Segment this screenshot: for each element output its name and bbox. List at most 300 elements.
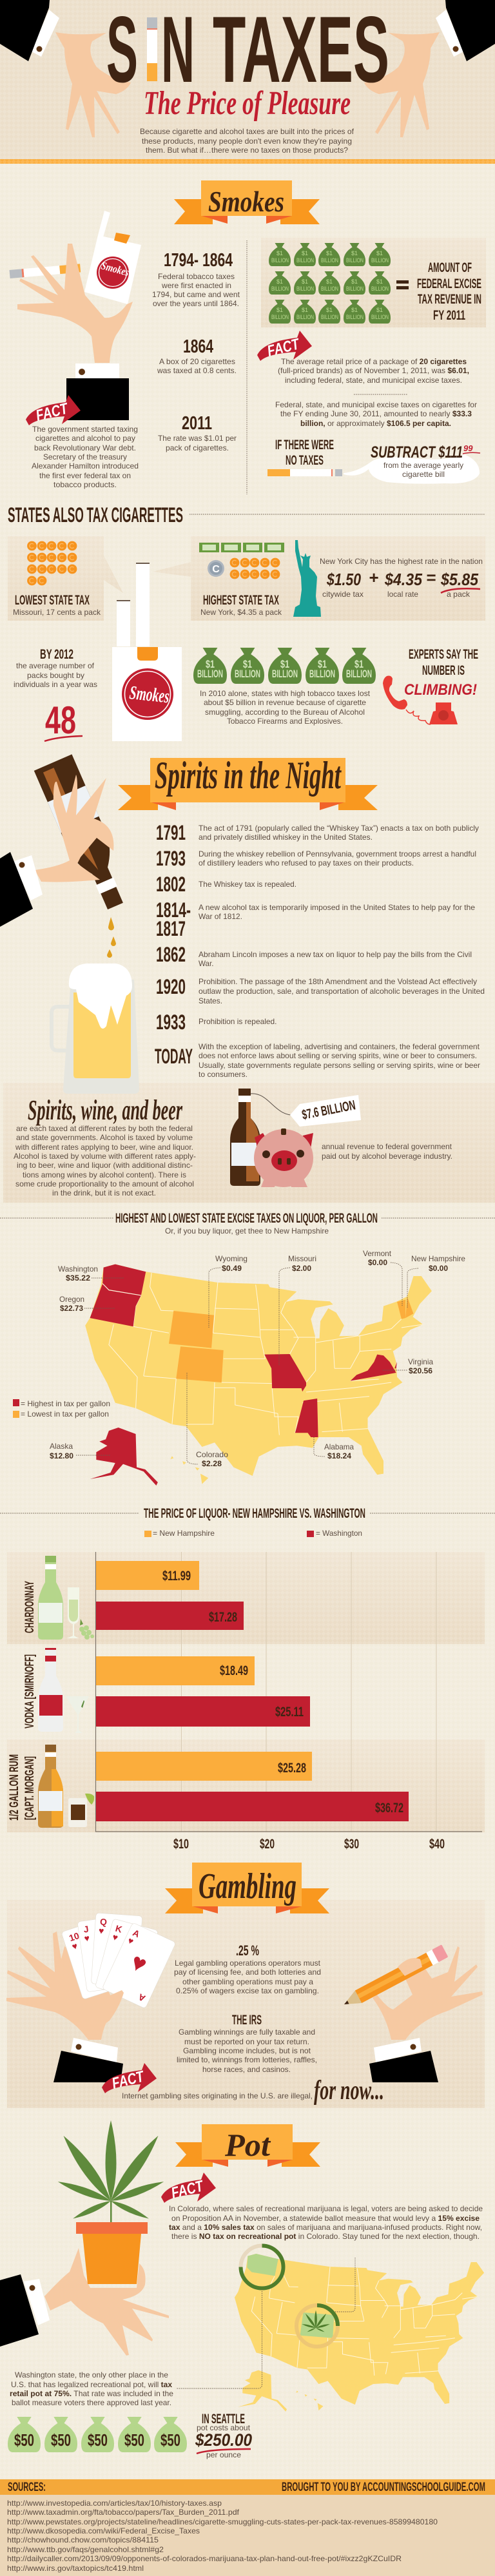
colorado fact text: there is NO tax on recreational pot in Colorado. Stay tuned for the next election, though. <box>171 2232 480 2241</box>
sources panel <box>0 2495 495 2576</box>
money bags: 15 billion: BILLION <box>346 314 364 320</box>
icon: playing cards: ♥ <box>99 1925 104 1936</box>
lowest state tax label <box>13 593 101 617</box>
money bags: 15 billion: $1 <box>302 250 308 257</box>
icon: cigarette <box>267 469 342 476</box>
map: legal marijuana states <box>235 2245 484 2412</box>
intro text: Because cigarette and alcohol taxes are built into the prices of <box>140 128 354 136</box>
entry 1793: 1793 <box>156 847 186 870</box>
experts say callout <box>404 647 478 699</box>
category label: vodka: VODKA [SMIRNOFF] <box>23 1654 37 1729</box>
bar: chardonnay New Hampshire: $11.99 <box>162 1569 191 1583</box>
icon: pouring bottle <box>34 754 134 915</box>
money bags: 5 billion lost <box>193 648 376 684</box>
highest state tax coins <box>230 558 280 579</box>
money bags: 15 billion: BILLION <box>271 257 289 264</box>
entry 1920: outlaw the production, sale, and transportation of alcoholic beverages in the United <box>199 987 485 996</box>
banner: Smokes: Smokes <box>208 185 284 218</box>
timeline 1864 <box>157 336 237 375</box>
banner: Smokes <box>174 180 320 224</box>
icon: beer mug <box>52 964 139 1094</box>
money bags: 15 billion: $1 <box>351 278 358 285</box>
spirits wine and beer heading: Spirits, wine, and beer <box>28 1094 183 1126</box>
new york city text and equation: citywide tax <box>322 590 364 599</box>
experts say callout: CLIMBING! <box>404 681 477 699</box>
left header hand <box>0 0 131 137</box>
icon: pencil <box>341 1944 448 2011</box>
timeline 1794-1864: were first enacted in <box>161 282 231 290</box>
money bags: 15 billion: $1 <box>326 278 333 285</box>
money bags: 50 dollars: $50 <box>88 2430 108 2450</box>
map label: Oregon <box>59 1295 84 1313</box>
map legend: = Lowest in tax per gallon <box>21 1410 109 1419</box>
icon: playing cards: Q <box>100 1916 108 1927</box>
fact arrow: gambling <box>102 2063 157 2093</box>
money bags: 5 billion lost: $1 <box>280 658 289 670</box>
entry today: to consumers. <box>199 1070 248 1079</box>
amount of federal excise tax revenue <box>417 260 481 323</box>
colorado fact text: In Colorado, where sales of recreational marijuana is legal, voters are being asked to decide <box>169 2205 483 2213</box>
smuggling text: Tobacco Firearms and Explosives. <box>227 717 343 726</box>
money bags: 15 billion <box>269 243 391 324</box>
fact text: revolutionary war debt: Alexander Hamilton introduced <box>32 462 139 470</box>
money bags: 15 billion: $1 <box>376 250 383 257</box>
ring: Washington 75 percent <box>241 2245 284 2288</box>
lowest state tax label: Missouri, 17 cents a pack <box>13 608 101 617</box>
subtract callout: 99 <box>463 443 473 453</box>
washington state text <box>10 2371 173 2407</box>
fact arrow: right: FACT <box>266 335 302 360</box>
timeline 2011: 2011 <box>182 413 212 434</box>
annual revenue text <box>322 1143 452 1161</box>
bar: vodka Washington <box>96 1696 310 1727</box>
entry 1920: 1920 <box>156 975 186 998</box>
washington state text: ballot measure voters there approved last year. <box>12 2399 171 2407</box>
if there were no taxes <box>275 438 334 468</box>
icon: cigarette as letter I <box>147 17 157 81</box>
icon: drips <box>107 917 116 958</box>
map label: New Hampshire: New Hampshire <box>411 1255 465 1263</box>
money bags: 15 billion: BILLION <box>371 286 389 292</box>
in seattle callout: IN SEATTLE <box>202 2412 245 2426</box>
in seattle callout: $250.00 <box>195 2430 252 2450</box>
entry 1862 <box>156 943 472 968</box>
map label: Washington: Washington <box>58 1265 98 1273</box>
money bags: 50 dollars <box>8 2417 187 2452</box>
timeline 2011: pack of cigarettes. <box>166 444 229 452</box>
in seattle callout: per ounce <box>206 2451 241 2459</box>
money bags: 5 billion lost: BILLION <box>309 668 335 680</box>
fact arrow: gambling: FACT <box>110 2068 147 2093</box>
subtitle: The Price of Pleasure <box>144 85 351 122</box>
background panels <box>3 238 495 2108</box>
bar: vodka New Hampshire: $18.49 <box>220 1663 248 1678</box>
icon: bottle with tag <box>230 1089 298 1186</box>
money bags: 5 billion lost: BILLION <box>235 668 260 680</box>
category label: chardonnay: CHARDONNAY <box>23 1581 37 1633</box>
banner: Gambling <box>165 1863 329 1913</box>
map label: Wyoming: Wyoming <box>215 1255 248 1263</box>
money bags: 15 billion: BILLION <box>346 286 364 292</box>
highest state tax dollar bills <box>199 543 284 552</box>
entry today <box>155 1043 480 1079</box>
money bags: 15 billion: $1 <box>277 307 283 313</box>
gambling tax text: other gambling operations must pay a <box>182 1978 314 1986</box>
icon: statue of liberty <box>293 540 321 617</box>
intro text: them. But what if…there were no taxes on those products? <box>146 146 349 155</box>
money bags: 5 billion lost: BILLION <box>272 668 298 680</box>
icon: telephone <box>383 675 458 724</box>
map label: Missouri: $2.00 <box>292 1264 311 1273</box>
timeline 1794-1864 <box>152 250 240 308</box>
money bags: 5 billion lost: $1 <box>206 658 215 670</box>
footer bar: SOURCES: <box>8 2481 46 2494</box>
smuggling text <box>200 690 371 726</box>
chart legend <box>144 1529 362 1538</box>
header background <box>0 0 495 159</box>
money bags: 15 billion: $1 <box>326 307 333 313</box>
map label: Virginia: $20.56 <box>409 1367 433 1375</box>
entry 1802: The Whiskey tax is repealed. <box>199 880 296 889</box>
spirits wine and beer text <box>14 1125 196 1197</box>
sources list: http://www.pewstates.org/projects/stateline/headlines/cigarette-smuggling-cuts-states-per-pack-tax-revenues-85899480180 <box>7 2518 438 2526</box>
fact arrow: pot <box>161 2173 216 2203</box>
timeline 1794-1864: over the years until 1864. <box>153 300 239 308</box>
entry today: TODAY <box>155 1045 193 1068</box>
subtract callout <box>371 443 480 479</box>
fact text: revolutionary war debt: the first ever federal tax on <box>39 472 131 480</box>
pot map leader lines <box>176 2258 355 2388</box>
internet gambling fact text: for now... <box>314 2076 384 2106</box>
spirits wine and beer text: are each taxed at different rates by both the federal <box>16 1125 193 1133</box>
entry 1862: War. <box>199 960 214 968</box>
map label: Missouri: Missouri <box>288 1255 316 1263</box>
money bags: 15 billion: BILLION <box>346 257 364 264</box>
colorado fact text: on Proposition AA in November, a statewide ballot measure that would levy a 15% excise <box>171 2214 480 2223</box>
icon: cannabis plant <box>57 2120 165 2222</box>
gambling tax text: pay of licensing fee, and both lotteries and <box>174 1968 321 1977</box>
right hand holding pencil <box>341 1944 483 2082</box>
sources list: http://www.taxadmin.org/fta/tobacco/papers/Tax_Burden_2011.pdf <box>7 2508 240 2517</box>
subtract callout: cigarette bill <box>402 470 445 479</box>
right header hand <box>364 0 495 137</box>
map label: Oregon: Oregon <box>59 1295 84 1304</box>
banner: Pot: Pot <box>224 2127 271 2163</box>
money bags: 15 billion: BILLION <box>321 257 338 264</box>
money bags: 15 billion: BILLION <box>371 257 389 264</box>
money bags: 50 dollars: $50 <box>160 2430 180 2450</box>
heading: states also tax cigarettes: STATES ALSO TAX CIGARETTES <box>8 503 183 527</box>
map label: New Hampshire <box>411 1255 465 1273</box>
highest state tax label: New York, $4.35 a pack <box>200 608 282 617</box>
amount of federal excise tax revenue: FY 2011 <box>433 308 465 323</box>
gambling tax text: Legal gambling operations operators must <box>175 1959 321 1968</box>
entry today: does not enforce laws about selling or serving spirits, wine or beer to consumers. <box>199 1052 477 1060</box>
icon: rum bottle and glass <box>38 1745 94 1828</box>
entry 1933 <box>156 1011 277 1034</box>
lowest state tax coins <box>27 541 77 585</box>
new york city text and equation: New York City has the highest rate in the nation <box>320 557 483 566</box>
timeline 1864: was taxed at 0.8 cents. <box>157 367 237 375</box>
money bags: 5 billion lost: $1 <box>354 658 364 670</box>
category label: rum: 1/2 GALLON RUM <box>8 1754 21 1821</box>
fact arrow: left <box>26 395 81 425</box>
new york city text and equation: $4.35 <box>384 570 422 589</box>
money bags: 50 dollars: $50 <box>14 2430 34 2450</box>
gambling tax text: .25 % <box>236 1942 259 1959</box>
entry today: With the exception of labeling, advertising and containers, the federal government <box>199 1043 480 1051</box>
entry 1791: 1791 <box>156 821 186 844</box>
left hand holding cards <box>6 1913 176 2082</box>
entry 1793: of distillery leaders who refused to pay taxes on their products. <box>199 859 414 867</box>
map label: Alaska <box>50 1442 73 1460</box>
bar: vodka New Hampshire <box>96 1656 255 1685</box>
timeline 2011: The rate was $1.01 per <box>158 434 237 443</box>
money bags: 15 billion: $1 <box>326 250 333 257</box>
by 2012 text: packs bought by <box>27 672 84 680</box>
IRS text: horse races, and casinos. <box>202 2066 291 2074</box>
map label: New Hampshire: $0.00 <box>429 1264 448 1273</box>
entry 1862: Abraham Lincoln imposes a new tax on liquor to help pay the bills from the Civil <box>199 951 472 959</box>
annual revenue text: paid out by alcohol beverage industry. <box>322 1152 452 1161</box>
money bags: 15 billion: BILLION <box>296 257 314 264</box>
fact text: revolutionary war debt: back Revolutionary War debt. <box>34 444 136 452</box>
entry 1920 <box>156 975 485 1005</box>
highest state tax label: HIGHEST STATE TAX <box>203 593 279 608</box>
ring: Colorado <box>296 2305 338 2347</box>
fact arrow: pot: FACT <box>170 2177 206 2202</box>
icon: piggy bank <box>254 1128 313 1187</box>
entry 1814-1817: War of 1812. <box>199 913 242 921</box>
icon: playing cards: K <box>114 1923 123 1935</box>
icon: playing cards: ♥ <box>126 1948 151 1979</box>
icon: playing cards: ♥ <box>70 1941 79 1952</box>
in seattle callout: pot costs about <box>197 2424 251 2432</box>
money bags: 15 billion: $1 <box>376 307 383 313</box>
money bags: 15 billion: $1 <box>351 307 358 313</box>
spirits wine and beer text: Alcohol is taxed by volume with different rates apply- <box>14 1152 196 1161</box>
bar: vodka Washington: $25.11 <box>275 1705 304 1719</box>
internet gambling fact text <box>122 2076 384 2106</box>
sources list: http://www.investopedia.com/articles/tax/10/history-taxes.asp <box>7 2499 222 2508</box>
sources list: http://www.irs.gov/taxtopics/tc419.html <box>7 2564 144 2573</box>
bar chart <box>95 1552 482 1832</box>
if there were no taxes: IF THERE WERE <box>275 438 334 452</box>
entry 1814-1817 <box>156 898 475 940</box>
orange header bar <box>0 159 495 164</box>
entry 1814-1817: 1817 <box>156 917 186 940</box>
category label: rum: [CAPT. MORGAN] <box>23 1756 37 1820</box>
map label: Virginia: Virginia <box>408 1358 434 1366</box>
chart legend: = Washington <box>316 1529 362 1538</box>
map label: Washington: $35.22 <box>66 1274 90 1283</box>
icon: silver dollar coin: C <box>212 564 220 575</box>
in seattle callout <box>195 2412 252 2459</box>
banner: Pot <box>175 2124 320 2167</box>
icon: playing cards: A <box>137 1991 147 2004</box>
map label: Vermont: Vermont <box>363 1250 392 1258</box>
entry 1793: During the whiskey rebellion of Pennsylvania, government troops arrest a handful <box>199 850 476 858</box>
fact text: revolutionary war debt <box>32 425 139 489</box>
entry 1920: States. <box>199 997 222 1005</box>
sources list <box>7 2499 438 2573</box>
money bags: 15 billion: $1 <box>376 278 383 285</box>
entry 1862: 1862 <box>156 943 186 966</box>
fact text: retail price: including federal, state, and municipal excise taxes. <box>285 376 462 385</box>
smoke bubble <box>344 454 480 484</box>
icon: cigarette pack <box>84 211 141 304</box>
subheading: Or, if you buy liquor, get thee to New Hampshire <box>165 1227 329 1235</box>
new york city text and equation: = <box>426 568 436 587</box>
spirits wine and beer text: with different rates applying to beer, wine and liquor. <box>15 1143 193 1152</box>
map label: Colorado <box>196 1451 228 1468</box>
axis labels: $10 <box>173 1837 189 1852</box>
money bags: 15 billion: BILLION <box>321 314 338 320</box>
fact text: revolutionary war debt: The government started taxing <box>32 425 138 434</box>
timeline <box>155 821 485 1079</box>
money bags: 15 billion: $1 <box>302 278 308 285</box>
map label: Wyoming <box>215 1255 248 1273</box>
entry 1933: 1933 <box>156 1011 186 1034</box>
footer bar <box>0 2479 495 2495</box>
timeline 1794-1864: 1794- 1864 <box>164 250 233 271</box>
icon: playing cards <box>61 1913 176 2009</box>
banner: Spirits in the Night <box>118 754 378 810</box>
by 2012 text <box>14 647 97 689</box>
bar: rum Washington <box>96 1792 409 1821</box>
map label: Alabama <box>324 1443 354 1460</box>
subtract callout: SUBTRACT $111 <box>371 443 463 461</box>
timeline 1794-1864: Federal tobacco taxes <box>158 273 235 281</box>
map label: Alabama: $18.24 <box>327 1452 352 1460</box>
entry 1791: and privately distilled whiskey in the United States. <box>199 833 373 842</box>
entry 1920: Prohibition. The passage of the 18th Amendment and the Volstead Act effectively <box>199 978 477 986</box>
icon: playing cards: ♥ <box>112 1932 119 1943</box>
if there were no taxes: NO TAXES <box>286 453 324 468</box>
intro text <box>140 128 354 155</box>
excise tax text <box>275 401 477 428</box>
entry 1802 <box>156 873 296 896</box>
axis labels: $20 <box>260 1837 275 1852</box>
fact text: retail price: The average retail price of a package of 20 cigarettes <box>281 358 467 366</box>
bar: rum New Hampshire: $25.28 <box>278 1761 306 1776</box>
entry 1814-1817: A new alcohol tax is temporarily imposed in the United States to help pay for the <box>199 904 475 912</box>
new york city text and equation: local rate <box>387 590 418 599</box>
entry 1791 <box>156 821 479 844</box>
map label: Virginia <box>408 1358 434 1375</box>
map label: Colorado: $2.28 <box>202 1460 222 1468</box>
map label: Oregon: $22.73 <box>60 1304 84 1313</box>
map legend: = Highest in tax per gallon <box>21 1400 110 1408</box>
money bags: 5 billion lost: $1 <box>318 658 327 670</box>
new york city text and equation: + <box>369 568 378 587</box>
price tag: 7.6 billion <box>290 1095 361 1127</box>
IRS text: must be reported on your tax return. <box>184 2038 309 2046</box>
fact text: revolutionary war debt: cigarettes and alcohol to pay <box>35 434 135 443</box>
map label: Wyoming: $0.49 <box>222 1264 242 1273</box>
by 2012 text: the average number of <box>16 662 95 670</box>
entry 1802: 1802 <box>156 873 186 896</box>
annual revenue text: annual revenue to federal government <box>322 1143 452 1151</box>
icon: cigarette held <box>9 264 81 278</box>
bar: chardonnay Washington <box>96 1602 244 1630</box>
money bags: 5 billion lost: BILLION <box>346 668 372 680</box>
excise tax text: billion, or approximately $106.5 per capita. <box>300 420 451 428</box>
money bags: 15 billion: BILLION <box>271 286 289 292</box>
timeline 1864: A box of 20 cigarettes <box>159 358 235 366</box>
banner: Spirits in the Night: Spirits in the Night <box>155 754 342 797</box>
hand holding flower pot <box>0 2222 169 2356</box>
icon: big cigarette pack: Smokes <box>128 682 170 707</box>
fact text: revolutionary war debt: Secretary of the treasury <box>43 453 127 461</box>
intro text: these products, many people don't even know they're paying <box>142 137 352 146</box>
by 2012 text: BY 2012 <box>40 647 73 662</box>
equals sign <box>396 280 409 289</box>
smuggling text: about $5 billion in revenue because of cigarette <box>204 699 366 707</box>
bar: chardonnay New Hampshire <box>96 1561 199 1590</box>
sources list: http://www.ttb.gov/faqs/genalcohol.shtml#g2 <box>7 2546 164 2554</box>
fact text: retail price: (full-priced brands) as of November 1, 2011, was $6.01, <box>278 367 469 375</box>
icon: big cigarette pack <box>112 563 182 741</box>
map: US excise taxes <box>85 1264 432 1486</box>
subtract callout: from the average yearly <box>383 461 463 470</box>
new york city text and equation: $1.50 <box>326 570 361 589</box>
excise tax text: Federal, state, and municipal excise taxes on cigarettes for <box>275 401 477 409</box>
fact text: revolutionary war debt: tobacco products. <box>53 481 117 489</box>
entry 1933: Prohibition is repealed. <box>199 1018 277 1026</box>
icon: playing cards: ♥ <box>126 1935 135 1946</box>
spirits wine and beer text: ing to beer, wine and liquor (with additional distinc- <box>17 1161 193 1170</box>
fact arrow: right <box>257 331 312 361</box>
map label: Alaska: Alaska <box>50 1442 73 1451</box>
icon: chardonnay bottle and glass <box>38 1556 94 1640</box>
money bags: 15 billion: $1 <box>302 307 308 313</box>
icon: playing cards: J <box>83 1924 90 1935</box>
money bags: 50 dollars: $50 <box>124 2430 144 2450</box>
washington state text: Washington state, the only other place in the <box>15 2371 168 2379</box>
banner: Gambling: Gambling <box>199 1866 296 1906</box>
smuggling text: smuggling, according to the Bureau of Alcohol <box>205 708 365 717</box>
map label: Vermont <box>363 1250 392 1267</box>
chart legend: = New Hampshire <box>153 1529 215 1538</box>
map label: Vermont: $0.00 <box>368 1259 387 1267</box>
money bags: 15 billion: $1 <box>277 250 283 257</box>
spirits wine and beer text: some crude proportionality to the amount of alcohol <box>15 1180 194 1188</box>
gambling tax text: 0.25% of wagers excise tax on gambling. <box>176 1987 319 1995</box>
colorado fact text <box>169 2205 483 2241</box>
map legend <box>13 1399 110 1419</box>
new york city text and equation <box>320 557 483 599</box>
sources list: http://dailycaller.com/2013/09/09/opponents-of-colorados-marijuana-tax-plan-hand-out-free-pot/#ixzz2gKZCuIDR <box>7 2555 402 2563</box>
sources list: http://chowhound.chow.com/topics/884115 <box>7 2536 159 2544</box>
IRS text <box>177 2013 317 2074</box>
entry 1793 <box>156 847 476 870</box>
timeline 2011 <box>158 413 237 452</box>
colorado fact text: tax and a 10% sales tax on sales of marijuana and marijuana-infused products. Right now, <box>169 2223 482 2232</box>
spirits wine and beer text: in the drink, but it is not exact. <box>52 1189 156 1197</box>
hand pouring with cuff <box>0 775 113 927</box>
IRS text: THE IRS <box>232 2013 262 2028</box>
map label: Missouri <box>288 1255 316 1273</box>
money bags: 50 dollars: $50 <box>51 2430 71 2450</box>
IRS text: Gambling income includes, but is not <box>183 2047 311 2055</box>
gambling tax text <box>174 1942 321 1995</box>
new york city text and equation: a pack <box>447 590 470 599</box>
icon: silver dollar coin <box>208 560 224 577</box>
sources list: http://www.dkosopedia.com/wiki/Federal_Excise_Taxes <box>7 2527 200 2535</box>
hand holding cigarette and pack <box>9 211 141 420</box>
fact arrow: left: FACT <box>34 400 71 425</box>
